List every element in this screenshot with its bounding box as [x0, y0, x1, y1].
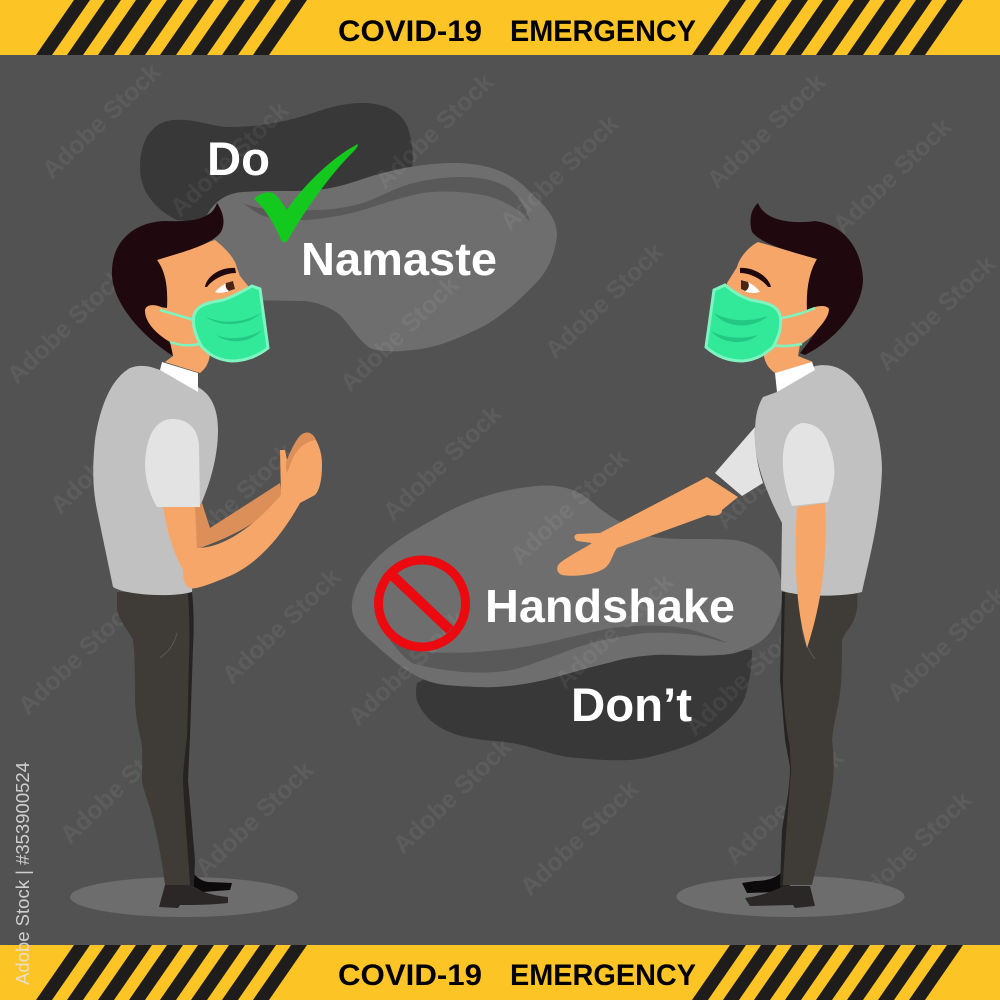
watermark: Adobe Stock	[45, 393, 174, 519]
watermark: Adobe Stock	[515, 775, 644, 901]
icon: green check mark	[254, 144, 358, 242]
top caution banner: COVID-19	[338, 15, 482, 48]
icon: red prohibition sign	[378, 560, 466, 647]
watermark: Adobe Stock	[55, 723, 184, 849]
watermark: Adobe Stock	[370, 68, 499, 194]
watermark: Adobe Stock	[872, 250, 1000, 376]
watermark: Adobe Stock	[165, 96, 294, 222]
extended arm and hand	[557, 477, 738, 576]
watermark: Adobe Stock	[37, 58, 166, 184]
mask straps	[773, 308, 815, 346]
ear	[797, 306, 829, 345]
face mask	[193, 286, 268, 361]
figure: right man offering handshake	[557, 203, 904, 917]
watermark: Adobe Stock	[217, 563, 346, 689]
watermark: Adobe Stock	[505, 444, 634, 570]
top caution banner: EMERGENCY	[510, 15, 696, 48]
watermark: Adobe Stock	[378, 400, 507, 526]
dark blob: Do	[140, 103, 413, 230]
bottom caution banner: EMERGENCY	[510, 959, 696, 992]
top caution banner	[0, 0, 1000, 55]
watermark: Adobe Stock	[170, 438, 299, 564]
swoosh	[388, 626, 728, 673]
grey blob: Namaste	[205, 163, 557, 351]
watermark: Adobe Stock	[190, 756, 319, 882]
front shoe	[745, 886, 815, 908]
pocket crease	[802, 627, 815, 659]
label: Namaste: Namaste	[301, 233, 497, 285]
watermark: Adobe Stock	[388, 733, 517, 859]
watermark: Adobe Stock	[702, 68, 831, 194]
raised arm and hand	[163, 433, 322, 588]
sleeve	[783, 423, 834, 506]
watermark: Adobe Stock	[13, 594, 142, 720]
swoosh	[243, 177, 530, 222]
ground shadow	[70, 877, 298, 917]
watermark: Adobe Stock	[710, 408, 839, 534]
collar	[160, 362, 198, 392]
far sleeve	[715, 427, 763, 496]
neck and face	[146, 240, 248, 373]
back shoe	[190, 872, 232, 892]
front leg	[117, 592, 190, 885]
face mask	[706, 285, 781, 361]
front shoe	[159, 885, 228, 908]
back leg stripe	[780, 592, 795, 886]
label: Handshake: Handshake	[485, 580, 735, 632]
hair	[112, 203, 224, 356]
bottom caution banner: COVID-19	[338, 959, 482, 992]
label: Do: Do	[207, 132, 270, 185]
watermark: Adobe Stock	[495, 110, 624, 236]
watermark: Adobe Stock	[335, 271, 464, 397]
hand shading	[286, 433, 316, 473]
label: Don't: Don’t	[571, 678, 692, 731]
watermark: Adobe Stock	[343, 605, 472, 731]
eye	[205, 268, 236, 293]
front leg	[783, 592, 857, 885]
sleeve	[145, 419, 200, 507]
back shoe	[742, 872, 785, 893]
watermark: Adobe Stock	[540, 238, 669, 364]
neck and face	[725, 242, 829, 373]
watermark: Adobe Stock	[2, 263, 131, 389]
shirt	[755, 365, 882, 596]
ear	[145, 305, 175, 342]
watermark: Adobe Stock	[680, 615, 809, 741]
eye	[740, 268, 771, 293]
pocket crease	[160, 633, 177, 658]
collar	[775, 362, 815, 392]
arm shadow	[195, 483, 282, 548]
shirt	[93, 366, 218, 595]
mask straps	[160, 310, 201, 345]
image id label: Adobe Stock | #353900524	[13, 762, 33, 985]
watermark: Adobe Stock	[550, 568, 679, 694]
ground shadow	[676, 876, 904, 917]
bottom caution banner	[0, 945, 1000, 1000]
watermark: Adobe Stock	[720, 744, 849, 870]
dark blob: Don't	[416, 640, 752, 760]
hanging arm	[796, 503, 826, 648]
grey blob: Handshake	[352, 486, 782, 687]
hair	[750, 203, 863, 355]
back leg stripe	[182, 592, 195, 886]
figure: left man doing namaste	[70, 203, 322, 917]
watermark: Adobe Stock	[828, 113, 957, 239]
watermark: Adobe Stock	[848, 786, 977, 912]
